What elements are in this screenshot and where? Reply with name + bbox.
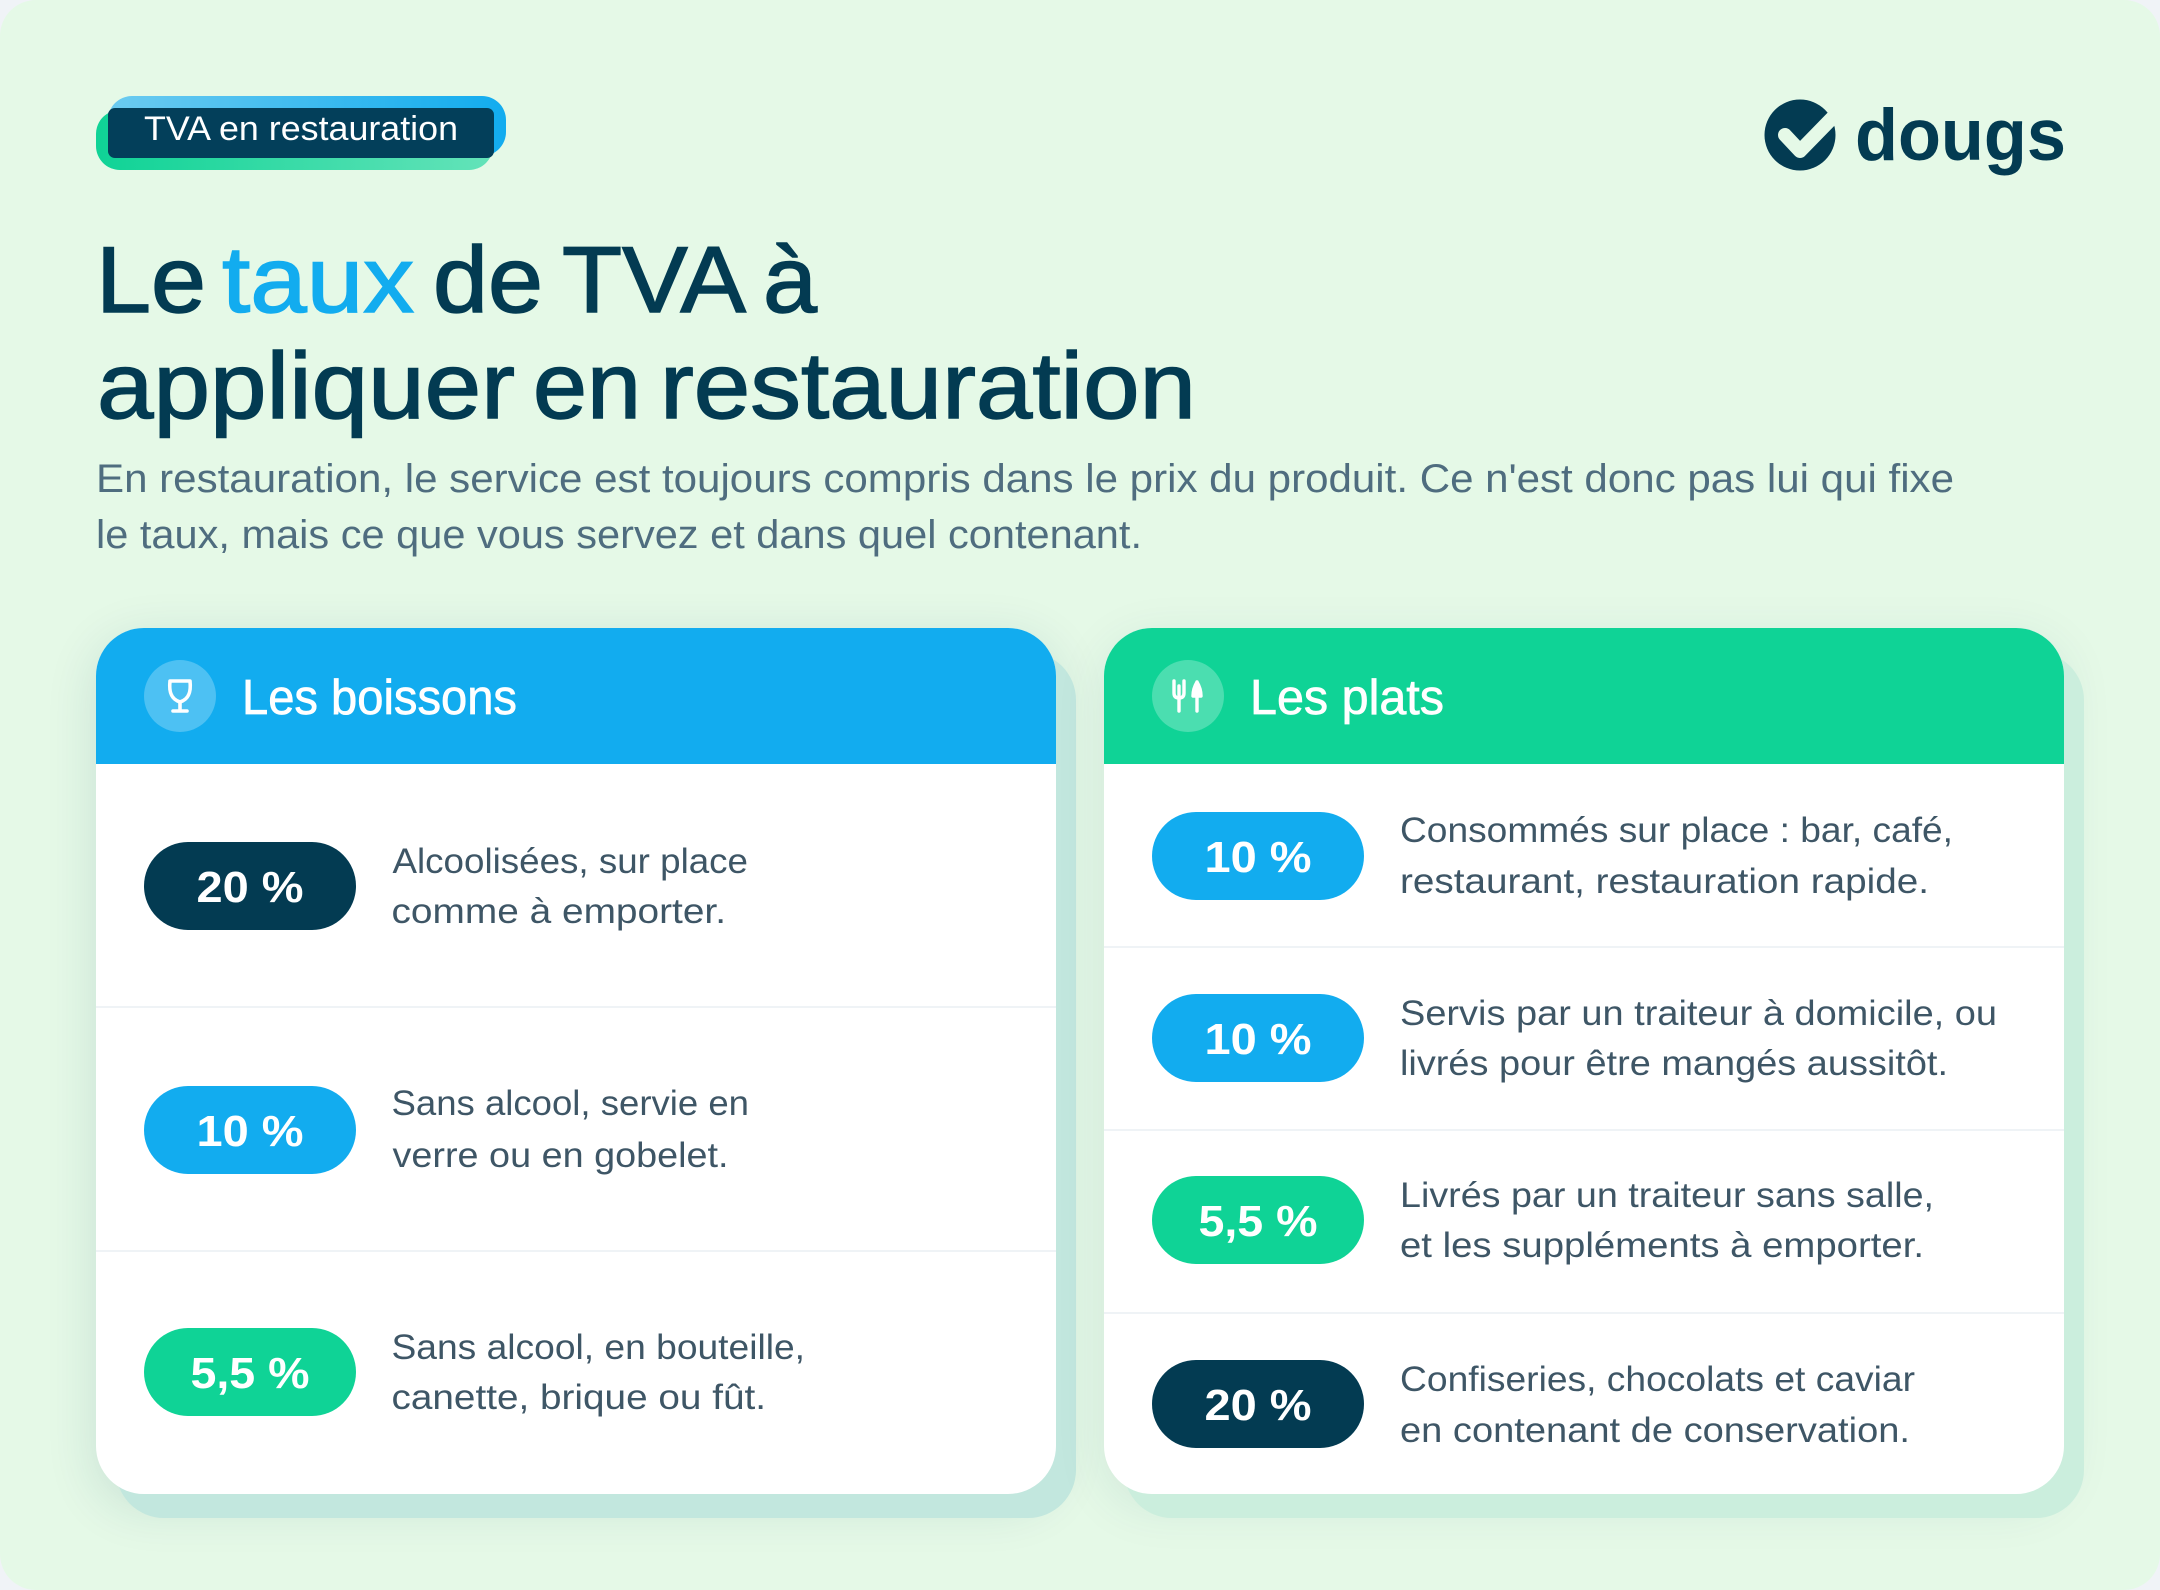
logo: dougs: dougs xyxy=(1855,95,2066,176)
icon: wine glass xyxy=(170,681,190,711)
row: 20 % alcoolisées xyxy=(144,842,748,931)
row: 5,5 % bouteille: Sans alcool, en bouteille, xyxy=(392,1328,805,1367)
row: 5,5 % traiteur sans salle: Livrés par un traiteur sans salle, xyxy=(1400,1176,1934,1215)
subtitle: En restauration, le service est toujours compris dans le prix du produit. Ce n'est donc pas lui qui fixe xyxy=(96,457,1954,501)
title: TVA xyxy=(562,227,746,332)
category badge xyxy=(96,96,506,170)
title: appliquer xyxy=(97,333,515,438)
row: 5,5 % traiteur sans salle xyxy=(1152,1176,1934,1265)
header: les plats: Les plats xyxy=(1250,671,1444,725)
title: taux xyxy=(222,227,414,332)
title: en xyxy=(533,333,641,438)
subtitle: le taux, mais ce que vous servez et dans quel contenant. xyxy=(96,513,1142,557)
row: 10 % traiteur xyxy=(1152,994,1997,1083)
header: les boissons: Les boissons xyxy=(242,671,517,725)
row: 20 % alcoolisées: 20 % xyxy=(196,863,304,912)
row: 10 % sans alcool: verre ou en gobelet. xyxy=(392,1136,728,1175)
row: 20 % alcoolisées: Alcoolisées, sur place xyxy=(392,842,748,881)
row: 5,5 % bouteille: 5,5 % xyxy=(190,1349,310,1398)
row: 20 % confiseries: en contenant de conservation. xyxy=(1400,1411,1910,1450)
panel: les boissons xyxy=(96,628,1076,1518)
row: 20 % confiseries xyxy=(1152,1360,1915,1450)
row: 20 % alcoolisées: comme à emporter. xyxy=(392,892,726,931)
row: 10 % sur place: Consommés sur place : bar, café, xyxy=(1400,811,1953,850)
row: 10 % traiteur: 10 % xyxy=(1204,1015,1312,1064)
title: à xyxy=(763,227,818,332)
row: 10 % sur place: 10 % xyxy=(1204,833,1312,882)
row: 10 % traiteur: livrés pour être mangés aussitôt. xyxy=(1400,1044,1948,1083)
panel: les plats xyxy=(1104,628,2084,1518)
subtitle xyxy=(96,457,1954,557)
row: 10 % sur place xyxy=(1152,811,1953,901)
category badge: TVA en restauration xyxy=(144,110,458,148)
icon: fork and knife xyxy=(1174,681,1201,711)
title xyxy=(96,227,1196,438)
row: 20 % confiseries: 20 % xyxy=(1204,1381,1312,1430)
row: 10 % traiteur: Servis par un traiteur à domicile, ou xyxy=(1400,994,1997,1033)
title: Le xyxy=(96,227,206,332)
logo: dougs xyxy=(1764,95,2066,176)
row: 10 % sur place: restaurant, restauration rapide. xyxy=(1400,862,1929,901)
row: 5,5 % traiteur sans salle: 5,5 % xyxy=(1198,1197,1318,1246)
row: 10 % sans alcool: Sans alcool, servie en xyxy=(392,1084,749,1123)
header: les plats xyxy=(1104,628,2064,764)
row: 10 % sans alcool xyxy=(144,1084,749,1175)
row: 5,5 % traiteur sans salle: et les suppléments à emporter. xyxy=(1400,1226,1924,1265)
title: de xyxy=(433,227,543,332)
row: 5,5 % bouteille: canette, brique ou fût. xyxy=(392,1378,766,1417)
header: les boissons xyxy=(96,628,1056,764)
row: 20 % confiseries: Confiseries, chocolats et caviar xyxy=(1400,1360,1915,1399)
row: 10 % sans alcool: 10 % xyxy=(196,1107,304,1156)
title: restauration xyxy=(660,333,1196,438)
row: 5,5 % bouteille xyxy=(144,1328,805,1417)
